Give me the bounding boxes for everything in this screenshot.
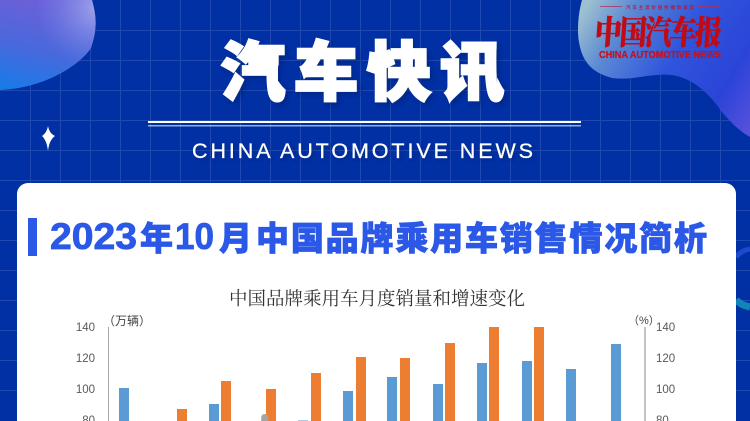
left axis bbox=[76, 322, 108, 421]
article heading: 2023 bbox=[50, 216, 137, 257]
header subtitle: CHINA AUTOMOTIVE NEWS bbox=[192, 139, 533, 163]
logo wordmark: 中国汽车报 bbox=[593, 15, 723, 52]
left axis: 100 bbox=[76, 384, 95, 396]
heading accent bar bbox=[28, 218, 37, 256]
logo tagline: 汽车主流价值传播新高度 bbox=[626, 4, 694, 11]
header title: 汽车快讯 bbox=[221, 37, 504, 109]
left axis: 120 bbox=[76, 353, 95, 365]
chart title: 中国品牌乘用车月度销量和增速变化 bbox=[229, 289, 525, 310]
right axis: 120 bbox=[656, 353, 675, 365]
article heading bbox=[50, 216, 707, 257]
article heading: 中国品牌乘用车销售情况简析 bbox=[256, 220, 707, 257]
blue bars: sales bbox=[119, 344, 621, 421]
chart: monthly sales and growth bbox=[76, 289, 675, 421]
decorative blob: top right bbox=[578, 0, 750, 137]
header double rule bbox=[148, 121, 581, 126]
article heading: 年 bbox=[140, 220, 173, 257]
article heading: 月 bbox=[219, 220, 252, 257]
logo: China Automotive News bbox=[593, 4, 723, 61]
logo english name: CHINA AUTOMOTIVE NEWS bbox=[599, 50, 721, 61]
panel: article card bbox=[17, 183, 736, 421]
right axis: 100 bbox=[656, 384, 675, 396]
line marker bbox=[261, 414, 268, 421]
orange bars: growth bbox=[177, 327, 544, 421]
right axis bbox=[645, 322, 675, 421]
article heading: 10 bbox=[175, 216, 214, 257]
decorative blob: top left bbox=[0, 0, 96, 90]
right axis: 140 bbox=[656, 322, 675, 334]
decorative curves: right edge bbox=[736, 249, 750, 307]
left axis: 140 bbox=[76, 322, 95, 334]
left axis unit: （万辆） bbox=[103, 314, 151, 328]
right axis unit: （%） bbox=[628, 314, 660, 327]
icon: white sparkle bbox=[42, 126, 55, 151]
